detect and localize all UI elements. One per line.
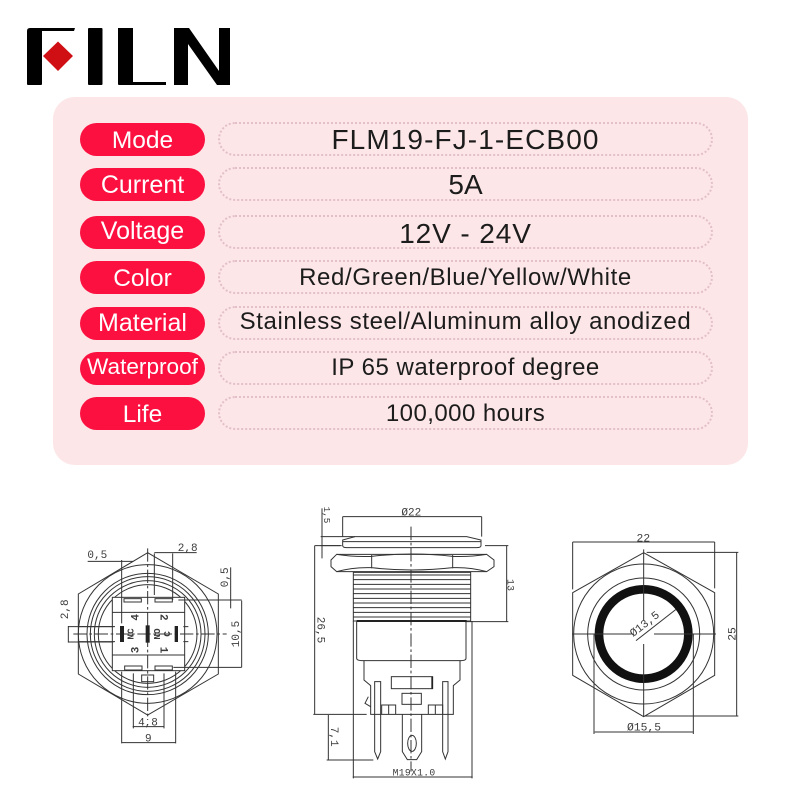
diagram: front view: Ø15,5 <box>627 722 661 734</box>
diagram: rear view terminals <box>60 543 243 745</box>
diagram: rear view terminals: 2,8 <box>60 599 72 619</box>
diagram: rear view terminals: 1 <box>157 647 169 654</box>
diagram: front view: 25 <box>728 627 740 641</box>
logo: FILN <box>27 28 230 85</box>
value: Current <box>218 167 713 201</box>
value: Waterproof <box>218 351 713 385</box>
label: Mode: Mode <box>112 127 173 154</box>
value: Waterproof: IP 65 waterproof degree <box>331 354 600 381</box>
diagram: rear view terminals: 3 <box>130 646 142 653</box>
label: Current <box>80 168 205 201</box>
value: Material: Stainless steel/Aluminum alloy anodized <box>240 308 691 335</box>
label: Waterproof: Waterproof <box>87 354 198 379</box>
value: Color <box>218 260 713 294</box>
diagram: front view <box>572 533 740 734</box>
diagram: side view: 7,1 <box>327 727 339 747</box>
label: Life: Life <box>123 401 162 428</box>
label: Material <box>80 307 205 340</box>
diagram: rear view terminals: 9 <box>145 733 152 745</box>
label: Waterproof <box>80 352 205 385</box>
value: Voltage: 12V - 24V <box>399 218 532 249</box>
diagram: side view: M19X1.0 <box>393 767 436 778</box>
diagram: front view: Ø13,5 <box>628 610 663 640</box>
label: Color <box>80 261 205 294</box>
label: Voltage: Voltage <box>101 217 184 245</box>
diagram: front view: 22 <box>637 533 650 545</box>
value: Current: 5A <box>448 169 483 200</box>
label: Mode <box>80 123 205 156</box>
value: Mode <box>218 122 713 156</box>
diagram: rear view terminals: NO <box>152 628 163 640</box>
diagram: rear view terminals: 2,8 <box>178 543 198 555</box>
diagram: rear view terminals: 0,5 <box>220 567 232 587</box>
value: Mode: FLM19-FJ-1-ECB00 <box>331 124 600 155</box>
diagram: rear view terminals: 10,5 <box>231 621 243 647</box>
diagram: rear view terminals: 2 <box>157 614 169 621</box>
diagram: rear view terminals: 0,5 <box>87 550 107 562</box>
value: Color: Red/Green/Blue/Yellow/White <box>299 264 632 291</box>
value: Life: 100,000 hours <box>386 400 545 427</box>
diagram: side view: 26,5 <box>314 617 326 643</box>
label: Current: Current <box>101 171 184 199</box>
value: Life <box>218 396 713 430</box>
diagram: side view <box>313 507 515 778</box>
diagram: rear view terminals: 4 <box>130 614 142 621</box>
label: Life <box>80 397 205 430</box>
diagram: side view: Ø22 <box>401 508 421 520</box>
diagram: rear view terminals: NC <box>125 628 136 640</box>
diagram: rear view terminals: 4,8 <box>138 718 158 730</box>
label: Color: Color <box>113 265 172 292</box>
panel: specifications <box>53 97 748 465</box>
diagram: rear view terminals: C <box>162 631 173 637</box>
label: Material: Material <box>98 309 187 337</box>
diagram: side view: 1,5 <box>321 507 332 523</box>
value: Voltage <box>218 215 713 249</box>
diagram: side view: 13 <box>504 579 515 591</box>
label: Voltage <box>80 216 205 249</box>
